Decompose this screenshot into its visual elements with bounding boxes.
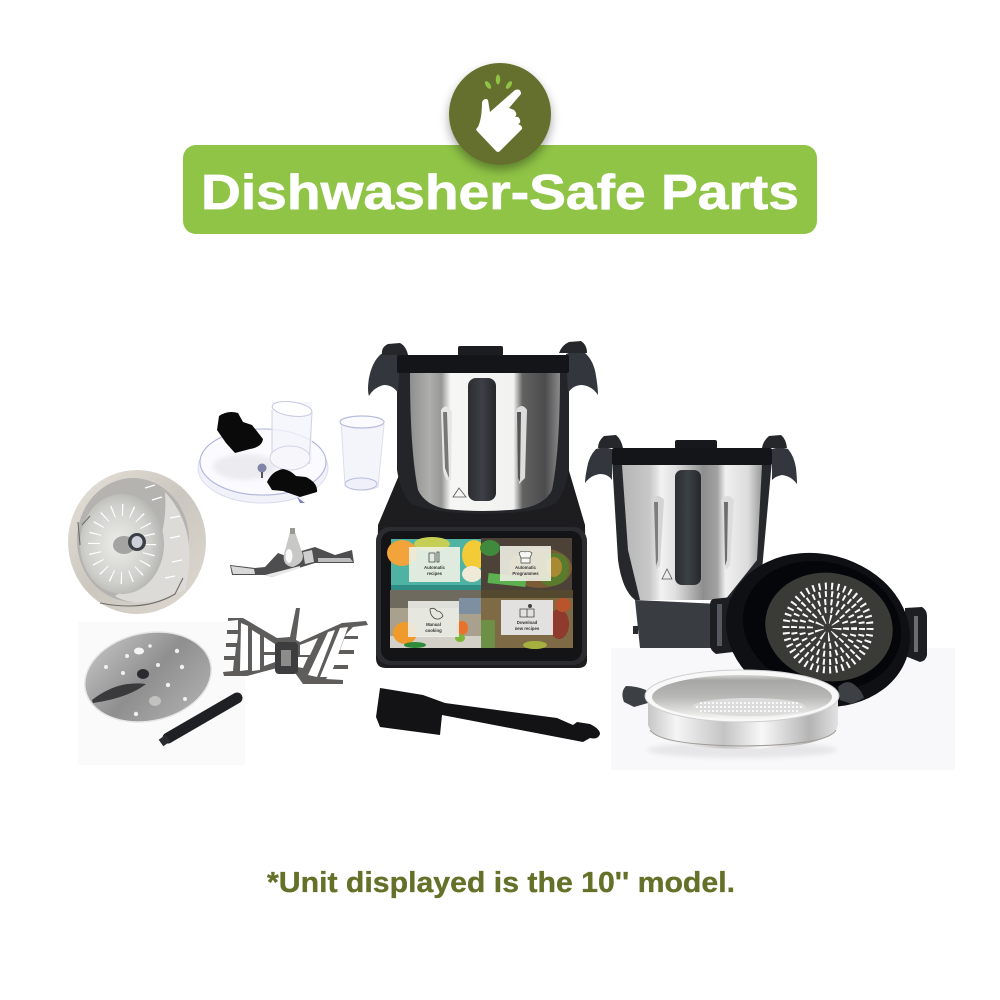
screen photo: avocado: Programmes: [512, 571, 539, 576]
lid with clear cylinder: [198, 399, 328, 503]
steamer tray: [622, 670, 864, 758]
title: Dishwasher-Safe Parts: [201, 166, 799, 220]
screen photo: kitchen: [390, 590, 481, 648]
food pusher: [161, 698, 237, 743]
screen photo: citrus: [387, 537, 486, 590]
second jug: [585, 435, 797, 648]
screen photo: avocado: [480, 538, 572, 590]
touchscreen panel: [376, 527, 587, 665]
basket right handle: [905, 607, 927, 662]
icon: tapping hand badge: [449, 63, 551, 165]
footnote: *Unit displayed is the 10'' model.: [267, 867, 735, 899]
screen photo: avocado: Automatic: [515, 565, 537, 570]
steaming basket: [709, 534, 927, 726]
appliance base: [376, 464, 587, 668]
main appliance: [368, 341, 598, 668]
kneading blade: [230, 528, 354, 577]
photo backdrop: disc: [78, 622, 245, 765]
screen photo: kitchen: Manual: [426, 622, 441, 627]
screen photo: ingredients: [481, 590, 573, 649]
slicing disc: [76, 621, 220, 733]
screen photo: citrus: recipes: [427, 571, 443, 576]
mixing bowl on base: [368, 341, 598, 514]
clear measuring cup: [340, 416, 384, 490]
screen photo: citrus: Automatic: [424, 565, 446, 570]
strainer basket: [68, 470, 206, 614]
butterfly whisk: [223, 608, 368, 684]
photo backdrop: steamer: [611, 648, 955, 770]
screen photo: ingredients: new recipes: [515, 626, 540, 631]
screen photo: kitchen: cooking: [425, 628, 442, 633]
header banner: [183, 145, 817, 234]
rubber grip top: [217, 412, 263, 453]
basket left handle: [710, 597, 733, 654]
screen photo: ingredients: Download: [517, 620, 538, 625]
rubber grip bottom: [267, 469, 317, 497]
spatula: [376, 688, 600, 742]
